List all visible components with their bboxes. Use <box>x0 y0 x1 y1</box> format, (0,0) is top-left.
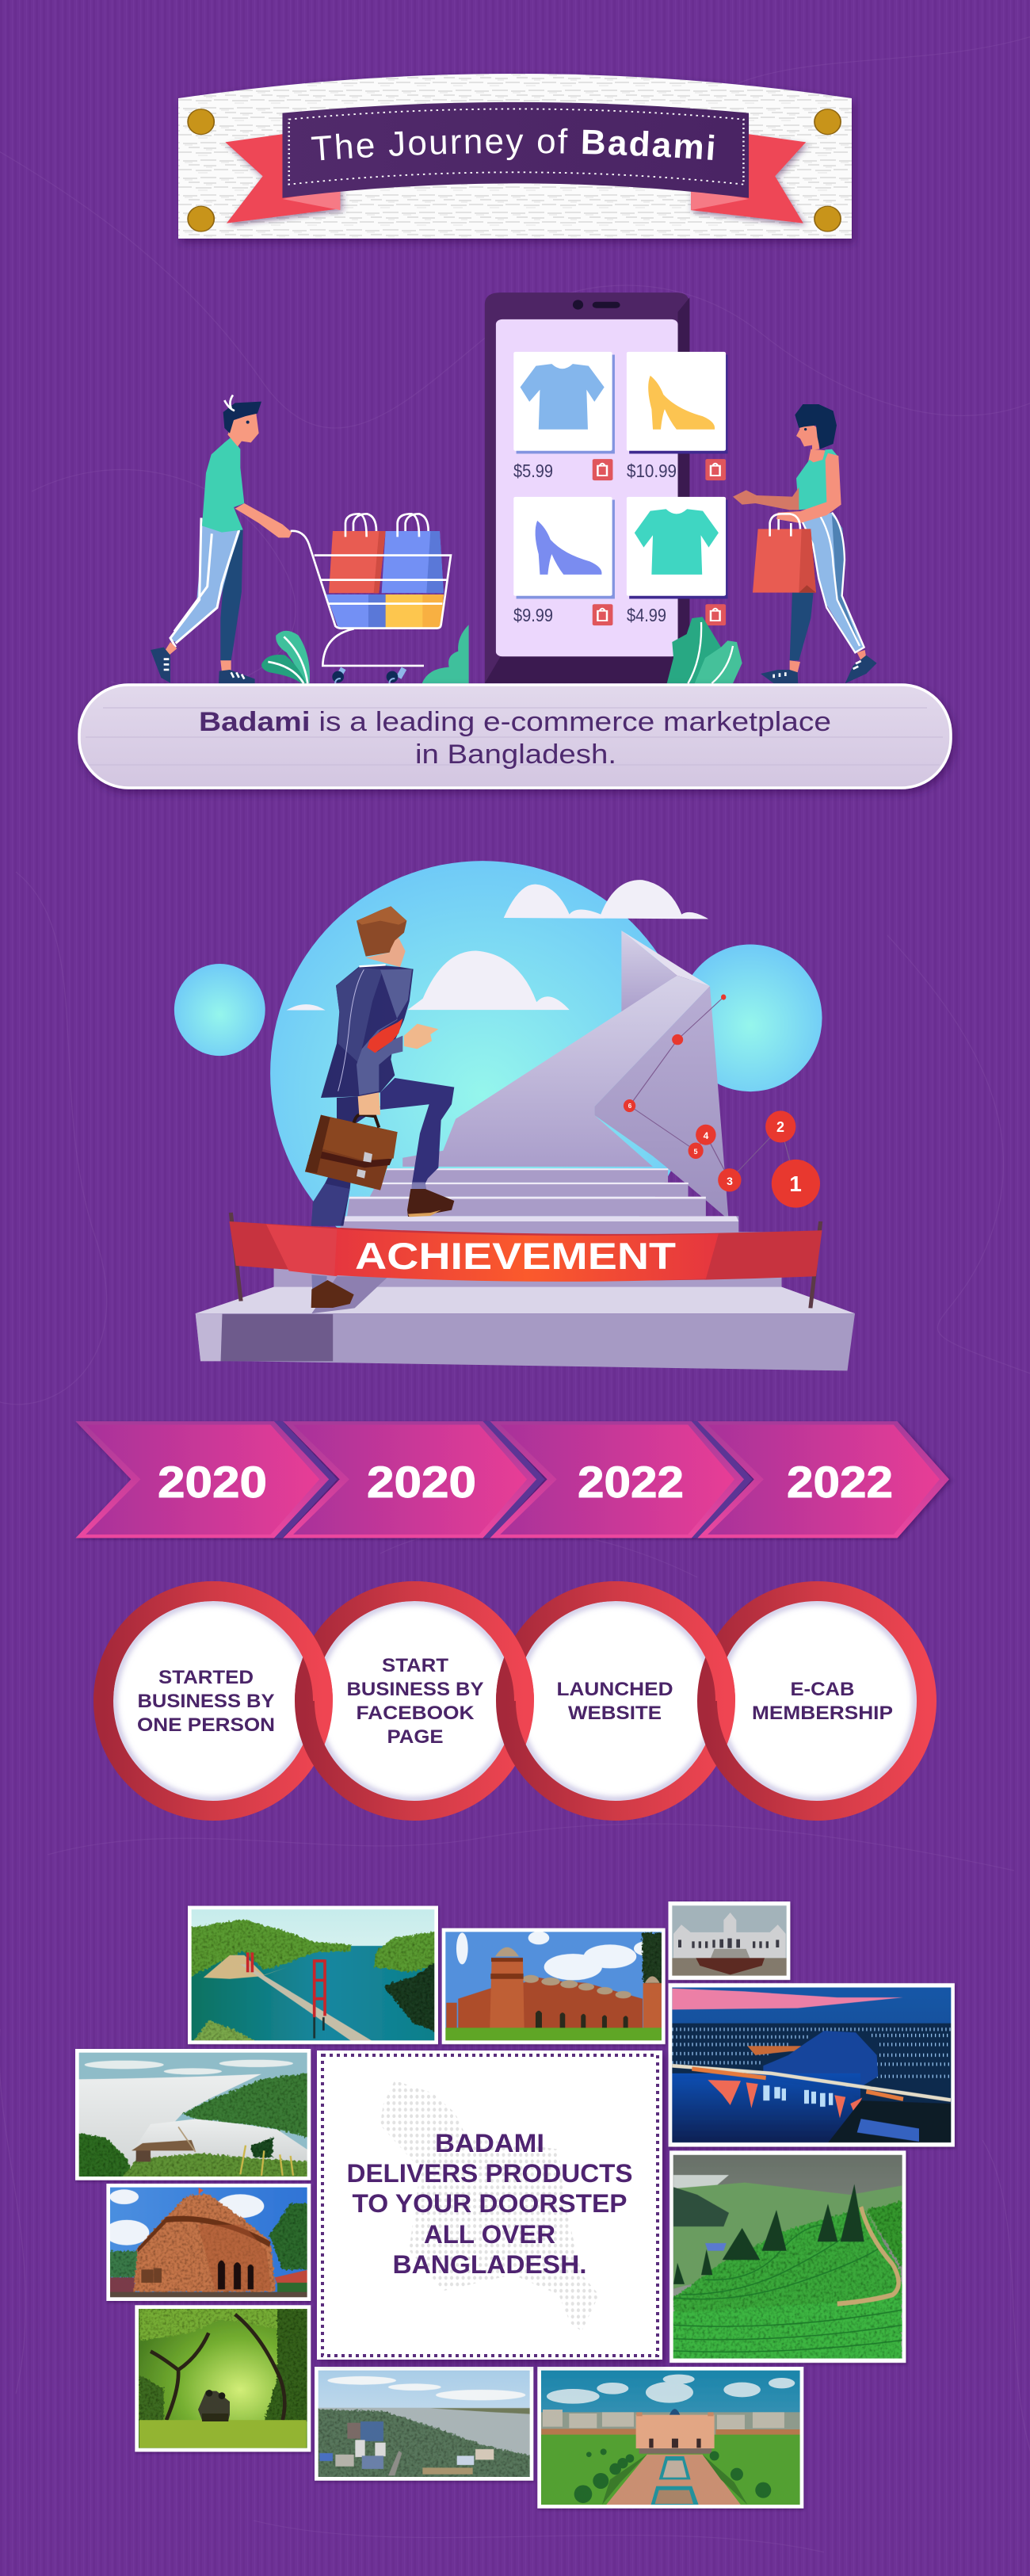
milestone 3 text <box>556 1679 673 1724</box>
fog, temple and forest frames <box>77 2050 309 2450</box>
title text: The Journey of Badami <box>311 128 715 160</box>
milestone 2 text: PAGE <box>387 1726 444 1748</box>
back leg <box>311 1096 380 1226</box>
marker numbers: 1 <box>789 1171 802 1196</box>
stairs <box>196 931 855 1370</box>
milestone 1 text: ONE PERSON <box>137 1714 275 1736</box>
businessman <box>305 906 454 1308</box>
delivery message: TO YOUR DOORSTEP <box>352 2189 628 2218</box>
lake and mosque frames <box>189 1908 663 2043</box>
photo: foggy hills <box>79 2053 307 2177</box>
ribbon and rivets art <box>188 102 841 231</box>
price labels <box>513 461 677 625</box>
milestone 2 text: START <box>382 1655 448 1676</box>
phone and products <box>485 292 728 683</box>
back lower leg <box>311 1183 350 1226</box>
chevron arrows <box>75 1421 949 1538</box>
sleeve <box>357 969 412 1095</box>
timeline chevrons <box>75 1421 949 1538</box>
icon: gold rivets <box>188 109 841 231</box>
chevron 3 <box>490 1421 753 1538</box>
product card: teal shirt <box>627 497 728 598</box>
price: teal shirt: $4.99 <box>627 605 666 625</box>
staircase scene <box>174 861 855 1370</box>
photo: lalbagh fort <box>541 2370 800 2505</box>
delivery message: ALL OVER <box>424 2220 555 2249</box>
milestone 3 text: WEBSITE <box>568 1703 662 1724</box>
jacket back panel <box>336 968 383 1062</box>
red ribbon tails <box>225 134 806 224</box>
marker numbers: 2 <box>776 1119 784 1135</box>
icon: cart buttons <box>593 459 726 625</box>
photo: sixty dome mosque <box>445 1932 662 2040</box>
delivery message <box>347 2129 632 2279</box>
chevron 4 <box>697 1421 949 1538</box>
milestone 4 text: MEMBERSHIP <box>752 1703 893 1724</box>
milestone 3 text: LAUNCHED <box>556 1679 673 1700</box>
palace, river city and tea garden photos <box>670 1903 953 2360</box>
clouds <box>286 880 708 1011</box>
woman with shopping bag and plant <box>667 404 877 683</box>
phone <box>485 292 689 683</box>
achievement illustration <box>174 861 855 1370</box>
year labels <box>158 1457 893 1507</box>
fog, temple and forest photos <box>77 2050 309 2450</box>
product card: blue heel <box>513 497 615 598</box>
interlocking rings <box>103 1592 927 1810</box>
collar <box>359 965 386 966</box>
milestone 2 text <box>347 1655 483 1748</box>
photo collage <box>77 1903 953 2506</box>
jacket <box>321 965 414 1098</box>
plant left <box>261 631 310 683</box>
white discs <box>112 1599 918 1802</box>
briefcase <box>305 1114 398 1191</box>
delivery message: DELIVERS PRODUCTS <box>347 2159 632 2188</box>
milestone 1 text: BUSINESS BY <box>138 1691 274 1712</box>
centre card <box>317 2050 662 2360</box>
palace, city and tea frames <box>670 1903 953 2360</box>
dotted map of Bangladesh <box>380 2081 599 2331</box>
milestone 1 text <box>137 1667 275 1736</box>
wood grain <box>86 708 943 765</box>
woman <box>733 404 877 683</box>
front leg <box>380 1078 454 1183</box>
product card: yellow heel <box>627 352 728 453</box>
marker numbers <box>628 1103 802 1196</box>
milestone 1 text: STARTED <box>158 1667 254 1688</box>
title plaque <box>177 74 856 247</box>
dotted stitching <box>289 109 743 185</box>
price: yellow heel: $10.99 <box>627 461 677 481</box>
description text: Badami is a leading e-commerce marketplace <box>199 707 831 737</box>
tie <box>367 1019 402 1053</box>
achievement text: ACHIEVEMENT <box>355 1235 676 1277</box>
purple banner <box>282 102 749 198</box>
plant right <box>667 617 742 683</box>
photo: terracotta temple <box>110 2188 307 2297</box>
illustration: online shopping <box>151 292 877 683</box>
product card: blue shirt <box>513 352 615 453</box>
year labels: 2020 <box>367 1457 476 1507</box>
marker numbers: 5 <box>693 1148 698 1156</box>
back sock and shoe <box>311 1275 354 1308</box>
chevron 2 <box>283 1421 545 1538</box>
chevron 1 <box>75 1421 338 1538</box>
year labels: 2020 <box>158 1457 267 1507</box>
plaque board <box>178 74 852 239</box>
milestone 4 text: E-CAB <box>791 1679 854 1700</box>
year labels: 2022 <box>578 1457 684 1507</box>
river town and fort photos <box>316 2368 802 2506</box>
price: shirt: $5.99 <box>513 461 553 481</box>
man <box>151 395 292 683</box>
marker numbers: 4 <box>704 1130 709 1141</box>
photo: swamp forest <box>139 2308 307 2448</box>
man with shopping cart and plant <box>151 395 469 683</box>
sky circles <box>174 861 822 1286</box>
front sock and shoe <box>407 1183 454 1217</box>
milestone rings <box>103 1592 927 1810</box>
milestone 2 text: BUSINESS BY <box>347 1679 483 1700</box>
hand <box>404 1024 438 1049</box>
river and fort frames <box>316 2368 802 2506</box>
photo: palace <box>672 1905 787 1976</box>
milestone 2 text: FACEBOOK <box>357 1703 475 1724</box>
wooden pill background <box>79 685 951 788</box>
shopping bags and boxes <box>326 514 444 628</box>
year labels: 2022 <box>787 1457 893 1507</box>
achievement ribbon <box>229 1213 822 1308</box>
marker numbers: 6 <box>628 1103 632 1110</box>
lower hand <box>358 1092 380 1115</box>
delivery message: BADAMI <box>435 2129 544 2157</box>
photo: river city at night <box>672 1987 952 2143</box>
price: blue heel: $9.99 <box>513 605 553 625</box>
delivery message: BANGLADESH. <box>393 2250 586 2279</box>
photo: lake and bridge <box>192 1909 434 2040</box>
lake and mosque photos <box>189 1908 663 2043</box>
marker numbers: 3 <box>727 1175 733 1187</box>
photo: river town <box>319 2370 530 2477</box>
jacket seam <box>338 969 364 1091</box>
red number markers <box>624 994 820 1208</box>
description text line 2: in Bangladesh. <box>415 740 616 770</box>
plant centre <box>422 625 469 683</box>
cart frame <box>291 531 451 683</box>
photo: tea garden <box>673 2154 902 2359</box>
description pill <box>79 685 951 788</box>
milestone 4 text <box>752 1679 893 1724</box>
skin and hair <box>357 906 406 967</box>
